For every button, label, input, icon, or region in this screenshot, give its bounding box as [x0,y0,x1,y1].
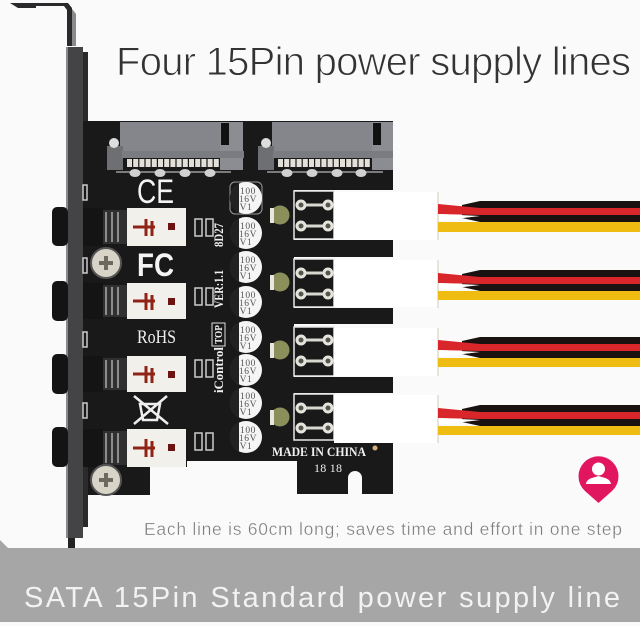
made in china label [272,444,378,475]
SATA connector 1 [107,122,244,177]
PCB board [83,121,393,495]
capacitor 8: V1 [240,442,252,452]
capacitor 6: V1 [240,375,252,385]
capacitor 6 [230,354,262,386]
bottom banner [0,540,640,622]
made in china label: MADE IN CHINA [272,444,367,459]
capacitor 4 [230,286,262,318]
capacitor 6: 100 [240,359,256,369]
capacitor 7: V1 [240,408,252,418]
capacitor 6: 16V [239,367,257,377]
caption: Each line is 60cm long; saves time and effort in one step [144,519,622,539]
mounting screws [91,248,121,495]
capacitor 5 [230,321,262,353]
LEDs [270,206,290,426]
capacitor 5: 100 [240,326,256,336]
capacitor 7: 100 [240,392,256,402]
rotated board text: 8D27 [211,223,226,247]
capacitor 5: V1 [240,342,252,352]
rotated board text: iControl [211,347,226,393]
title: Four 15Pin power supply lines [116,40,631,84]
capacitor 3: 100 [240,256,256,266]
rotated board text [211,223,226,393]
switch 2 [127,283,186,319]
capacitor 3: 16V [239,264,257,274]
FCC mark: FC [137,247,174,283]
capacitor 5: 16V [239,334,257,344]
capacitor 4: 100 [240,291,256,301]
capacitor 8: 16V [239,434,257,444]
capacitor 1: 16V [239,195,257,205]
socket pads [297,201,332,432]
wire bundle 3 [438,337,640,367]
wire bundle 2 [438,270,640,300]
capacitor 2 [230,217,262,249]
capacitor 7 [230,387,262,419]
switch 3 [127,356,186,392]
capacitor 8 [230,421,262,453]
capacitor 3: V1 [240,272,252,282]
capacitor 1: V1 [240,203,252,213]
capacitor 2: 100 [240,222,256,232]
wire bundle 4 [438,405,640,435]
white plug housings [334,192,439,443]
capacitor 8: 100 [240,426,256,436]
WEEE bin mark [134,396,168,424]
capacitor 3 [230,251,262,283]
capacitor 7: 16V [239,400,257,410]
RoHS mark: RoHS [137,327,176,348]
SATA connector 2 [258,122,393,177]
connector sockets on board [294,191,334,440]
capacitor 4: 16V [239,299,257,309]
CE mark: CE [137,173,174,211]
capacitor 4: V1 [240,307,252,317]
capacitor 1 [230,182,262,214]
rotated board text: TOP [214,325,225,344]
rotated board text: VER:1.1 [211,270,226,308]
small SMD parts [83,185,213,450]
banner text: SATA 15Pin Standard power supply line [24,582,620,614]
wire bundle 1 [438,201,640,232]
switch 4 [127,429,186,467]
location person icon [578,456,618,503]
made in china label: 18 18 [314,461,342,475]
capacitor 2: 16V [239,230,257,240]
switch 1 [127,208,186,246]
capacitor 1: 100 [240,187,256,197]
capacitor 2: V1 [240,238,252,248]
metal bracket [10,3,88,548]
push buttons [52,207,127,467]
